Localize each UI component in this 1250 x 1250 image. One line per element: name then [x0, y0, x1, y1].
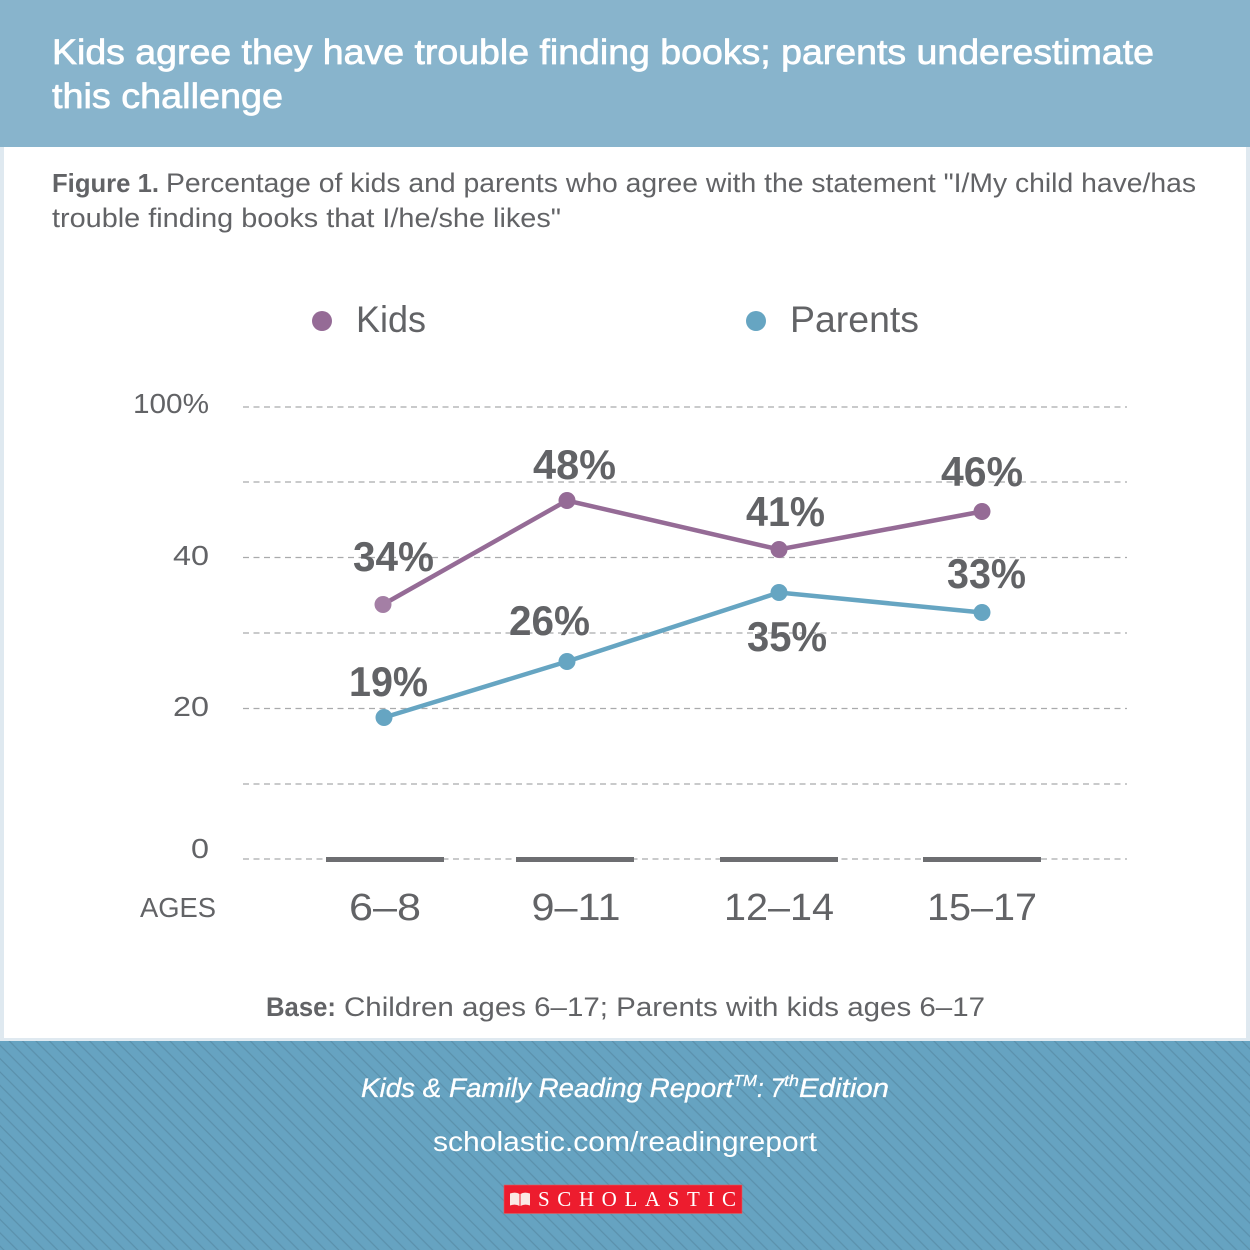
figure caption: trouble finding books that I/he/she likes" [52, 203, 561, 233]
title: Kids agree they have trouble finding books; parents underestimate [52, 33, 1154, 72]
kids line [374, 492, 990, 613]
x-axis labels: AGES [140, 892, 216, 923]
report edition: Edition [799, 1073, 889, 1103]
x-axis labels: 12–14 [724, 887, 834, 929]
value labels: 41% [746, 488, 825, 535]
legend: kids [312, 299, 426, 340]
value labels: 26% [509, 597, 590, 644]
y-axis labels: 20 [173, 691, 209, 722]
legend: parents: Parents [790, 299, 919, 340]
report edition: Kids & Family Reading Report [361, 1073, 735, 1103]
value labels: 46% [941, 448, 1023, 495]
value labels: 19% [349, 658, 428, 705]
x-axis labels: 9–11 [532, 887, 620, 929]
y-axis labels: 100% [133, 388, 209, 419]
legend: kids: Kids [356, 299, 426, 340]
header banner [0, 0, 1250, 147]
x-axis labels [140, 887, 1037, 929]
value labels: 33% [947, 550, 1026, 597]
value labels: 48% [533, 441, 616, 488]
report edition: : 7 [757, 1073, 785, 1103]
footer band [0, 1041, 1250, 1250]
icon: open book [510, 1193, 530, 1206]
value labels: 34% [353, 533, 434, 580]
white content panel [4, 147, 1246, 1038]
value labels [349, 441, 1026, 705]
legend [312, 299, 919, 340]
y-axis labels: 0 [191, 833, 209, 864]
y-axis labels: 40 [173, 540, 209, 571]
base note: Base: [266, 992, 336, 1022]
x-axis labels: 15–17 [927, 887, 1037, 929]
y-axis labels [133, 388, 209, 864]
report url: scholastic.com/readingreport [433, 1126, 817, 1157]
base note: Children ages 6–17; Parents with kids ages 6–17 [344, 992, 985, 1022]
x-axis labels: 6–8 [349, 887, 421, 929]
scholastic logo: SCHOLASTIC [538, 1187, 736, 1211]
report edition: th [784, 1073, 799, 1090]
line chart [133, 388, 1127, 929]
value labels: 35% [747, 613, 827, 660]
figure caption: Figure 1. [52, 168, 159, 198]
x-axis age ticks [326, 857, 1041, 862]
parents line [376, 584, 990, 726]
title: this challenge [52, 77, 283, 116]
figure caption: Percentage of kids and parents who agree with the statement "I/My child have/has [166, 168, 1196, 198]
report edition: TM [733, 1073, 758, 1090]
